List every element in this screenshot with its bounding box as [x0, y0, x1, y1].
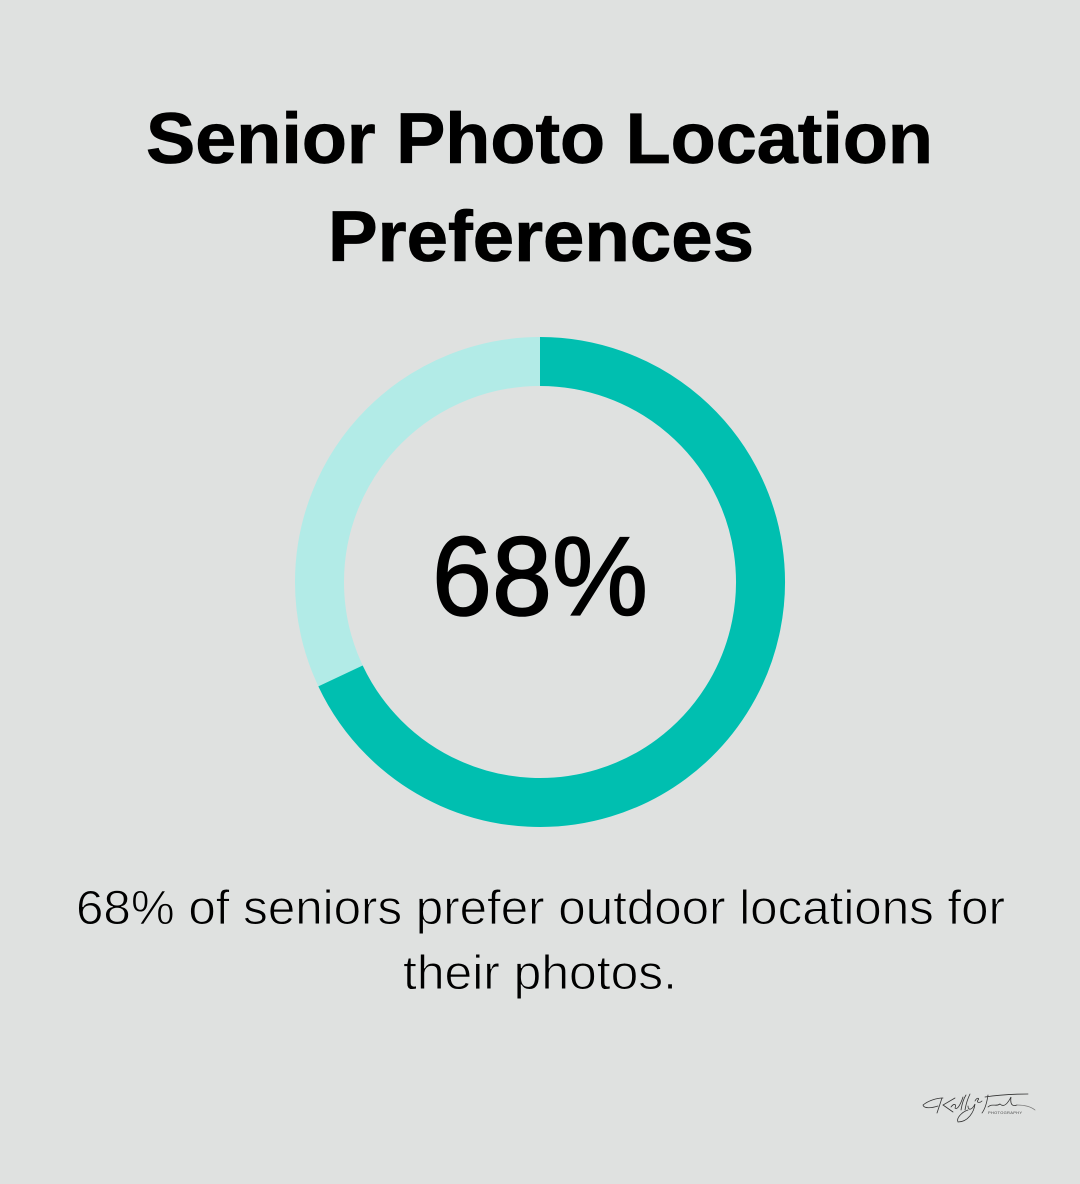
highlighted segment: 68% [340, 362, 761, 802]
logo: photographer signature: PHOTOGRAPHY [988, 1110, 1022, 1115]
description text: 68% of seniors prefer outdoor locations for [76, 882, 1005, 935]
center percentage: 68% [432, 514, 648, 639]
description text: their photos. [403, 947, 677, 1000]
description text [76, 882, 1005, 1000]
title: Preferences [328, 198, 754, 277]
remaining segment: 32% [320, 362, 760, 802]
title: Senior Photo Location [146, 100, 933, 179]
logo: photographer signature [923, 1094, 1035, 1122]
donut chart: 68% [320, 362, 761, 802]
title [146, 100, 933, 277]
